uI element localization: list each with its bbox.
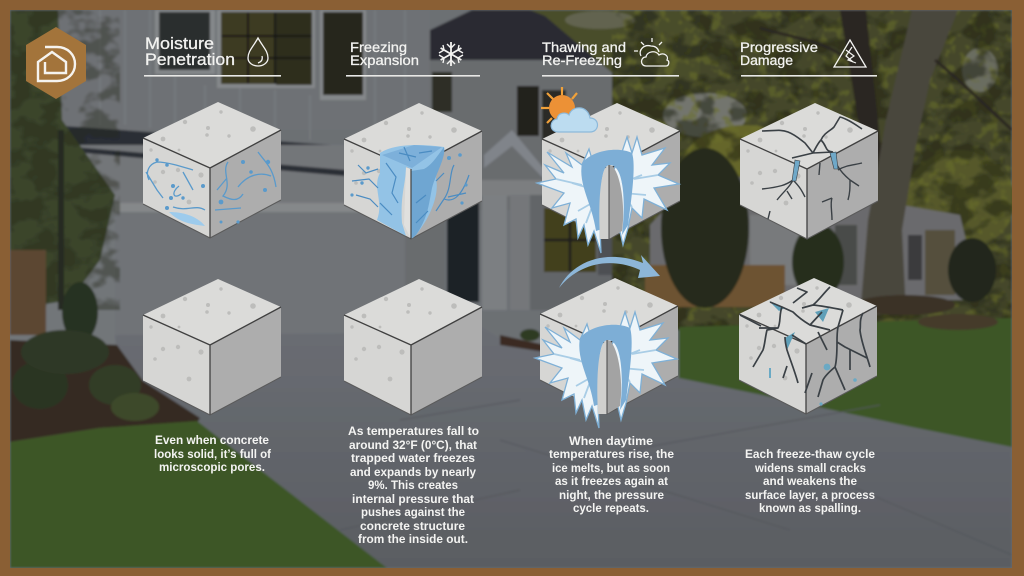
icon: sun and cloud outline xyxy=(634,38,669,66)
text: freezing description xyxy=(348,424,479,546)
text: damage description: Each freeze-thaw cycle xyxy=(745,447,875,461)
text: thawing description: night, the pressure xyxy=(559,488,664,502)
text: freezing description: pushes against the xyxy=(361,505,465,519)
text: damage description: surface layer, a process xyxy=(745,488,875,502)
cube: freezing water spreading xyxy=(344,103,482,239)
cube: severely cracked concrete xyxy=(739,278,877,414)
heading: freezing expansion xyxy=(346,39,480,77)
panel: moisture penetration xyxy=(143,35,281,474)
heading: thawing and re-freezing: Thawing and xyxy=(542,39,626,55)
panel: thawing and re-freezing xyxy=(535,38,680,515)
text: freezing description: around 32°F (0°C), that xyxy=(349,438,477,452)
text: thawing description: as it freezes again at xyxy=(555,474,668,488)
text: thawing description: temperatures rise, the xyxy=(549,447,674,461)
text: freezing description: trapped water freezes xyxy=(351,451,475,465)
cube: intact concrete xyxy=(344,279,482,415)
left tree xyxy=(10,10,115,310)
cube: cracked concrete xyxy=(740,103,878,239)
heading: moisture penetration: Moisture xyxy=(145,35,214,53)
text: damage description: widens small cracks xyxy=(754,461,866,475)
arrow: re-freeze cycle xyxy=(559,255,660,288)
heading: thawing and re-freezing: Re-Freezing xyxy=(542,52,622,68)
text: thawing description: When daytime xyxy=(569,434,653,448)
text: freezing description: from the inside out. xyxy=(358,532,468,546)
text: moisture description: microscopic pores. xyxy=(159,460,265,474)
text: freezing description: As temperatures fall to xyxy=(348,424,479,438)
heading: moisture penetration: Penetration xyxy=(145,51,235,69)
text: freezing description: and expands by nearly xyxy=(350,465,476,479)
cube: intact concrete xyxy=(143,279,281,415)
text: damage description: known as spalling. xyxy=(759,501,861,515)
cube: ice bursting from the surface xyxy=(537,103,680,253)
cube: ice re-freezing xyxy=(535,278,678,428)
text: freezing description: internal pressure that xyxy=(352,492,474,506)
text: thawing description: cycle repeats. xyxy=(573,501,649,515)
heading: freezing expansion: Expansion xyxy=(350,52,419,68)
text: thawing description: ice melts, but as soon xyxy=(552,461,670,475)
logo xyxy=(26,27,86,99)
panel: freezing expansion xyxy=(344,39,482,546)
text: freezing description: concrete structure xyxy=(360,519,465,533)
text: moisture description xyxy=(154,433,272,474)
text: damage description xyxy=(745,447,875,515)
icon: water drop xyxy=(248,38,268,66)
text: moisture description: Even when concrete xyxy=(155,433,269,447)
icon: snowflake xyxy=(439,42,463,66)
heading: freezing expansion: Freezing xyxy=(350,39,407,55)
neighbor house xyxy=(650,170,980,300)
text: freezing description: 9%. This creates xyxy=(368,478,458,492)
icon: warning triangle with cracks xyxy=(834,40,866,67)
heading: progressive damage xyxy=(740,39,877,77)
ground xyxy=(115,326,1012,568)
icon: sun behind cloud xyxy=(541,87,598,132)
trees backdrop xyxy=(612,10,1012,330)
heading: progressive damage: Progressive xyxy=(740,39,818,55)
text: moisture description: looks solid, it’s full of xyxy=(154,447,272,461)
text: damage description: and weakens the xyxy=(763,474,857,488)
cube: water-filled pores xyxy=(143,102,281,238)
text: thawing description xyxy=(549,434,674,515)
heading: progressive damage: Damage xyxy=(740,52,793,68)
heading: thawing and re-freezing xyxy=(542,39,679,77)
heading: moisture penetration xyxy=(144,35,281,77)
panel: progressive damage xyxy=(739,39,878,515)
